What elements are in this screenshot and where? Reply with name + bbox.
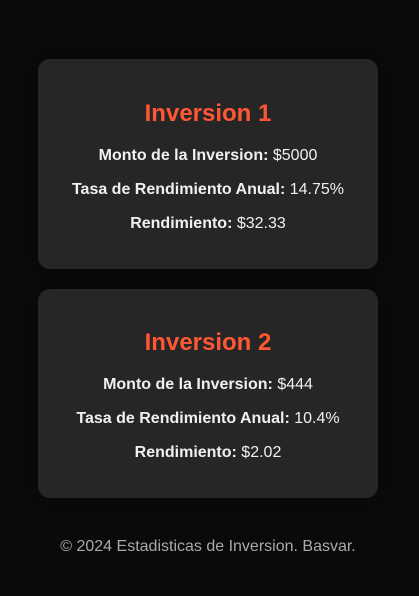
footer: © 2024 Estadisticas de Inversion. Basvar. (60, 538, 356, 555)
panel: investment 2 (38, 289, 378, 498)
panel: investment 1 (38, 59, 378, 269)
text: annual rate of return: Tasa de Rendimiento Anual: 10.4% (76, 410, 340, 427)
text: return: Rendimiento: $32.33 (130, 215, 286, 232)
heading: investment 2: Inversion 2 (145, 329, 271, 356)
text: amount invested: Monto de la Inversion: $5000 (99, 147, 317, 164)
text: return: Rendimiento: $2.02 (135, 444, 281, 461)
heading: investment 1: Inversion 1 (145, 100, 271, 127)
text: annual rate of return: Tasa de Rendimiento Anual: 14.75% (72, 181, 344, 198)
text: amount invested: Monto de la Inversion: $444 (103, 376, 313, 393)
